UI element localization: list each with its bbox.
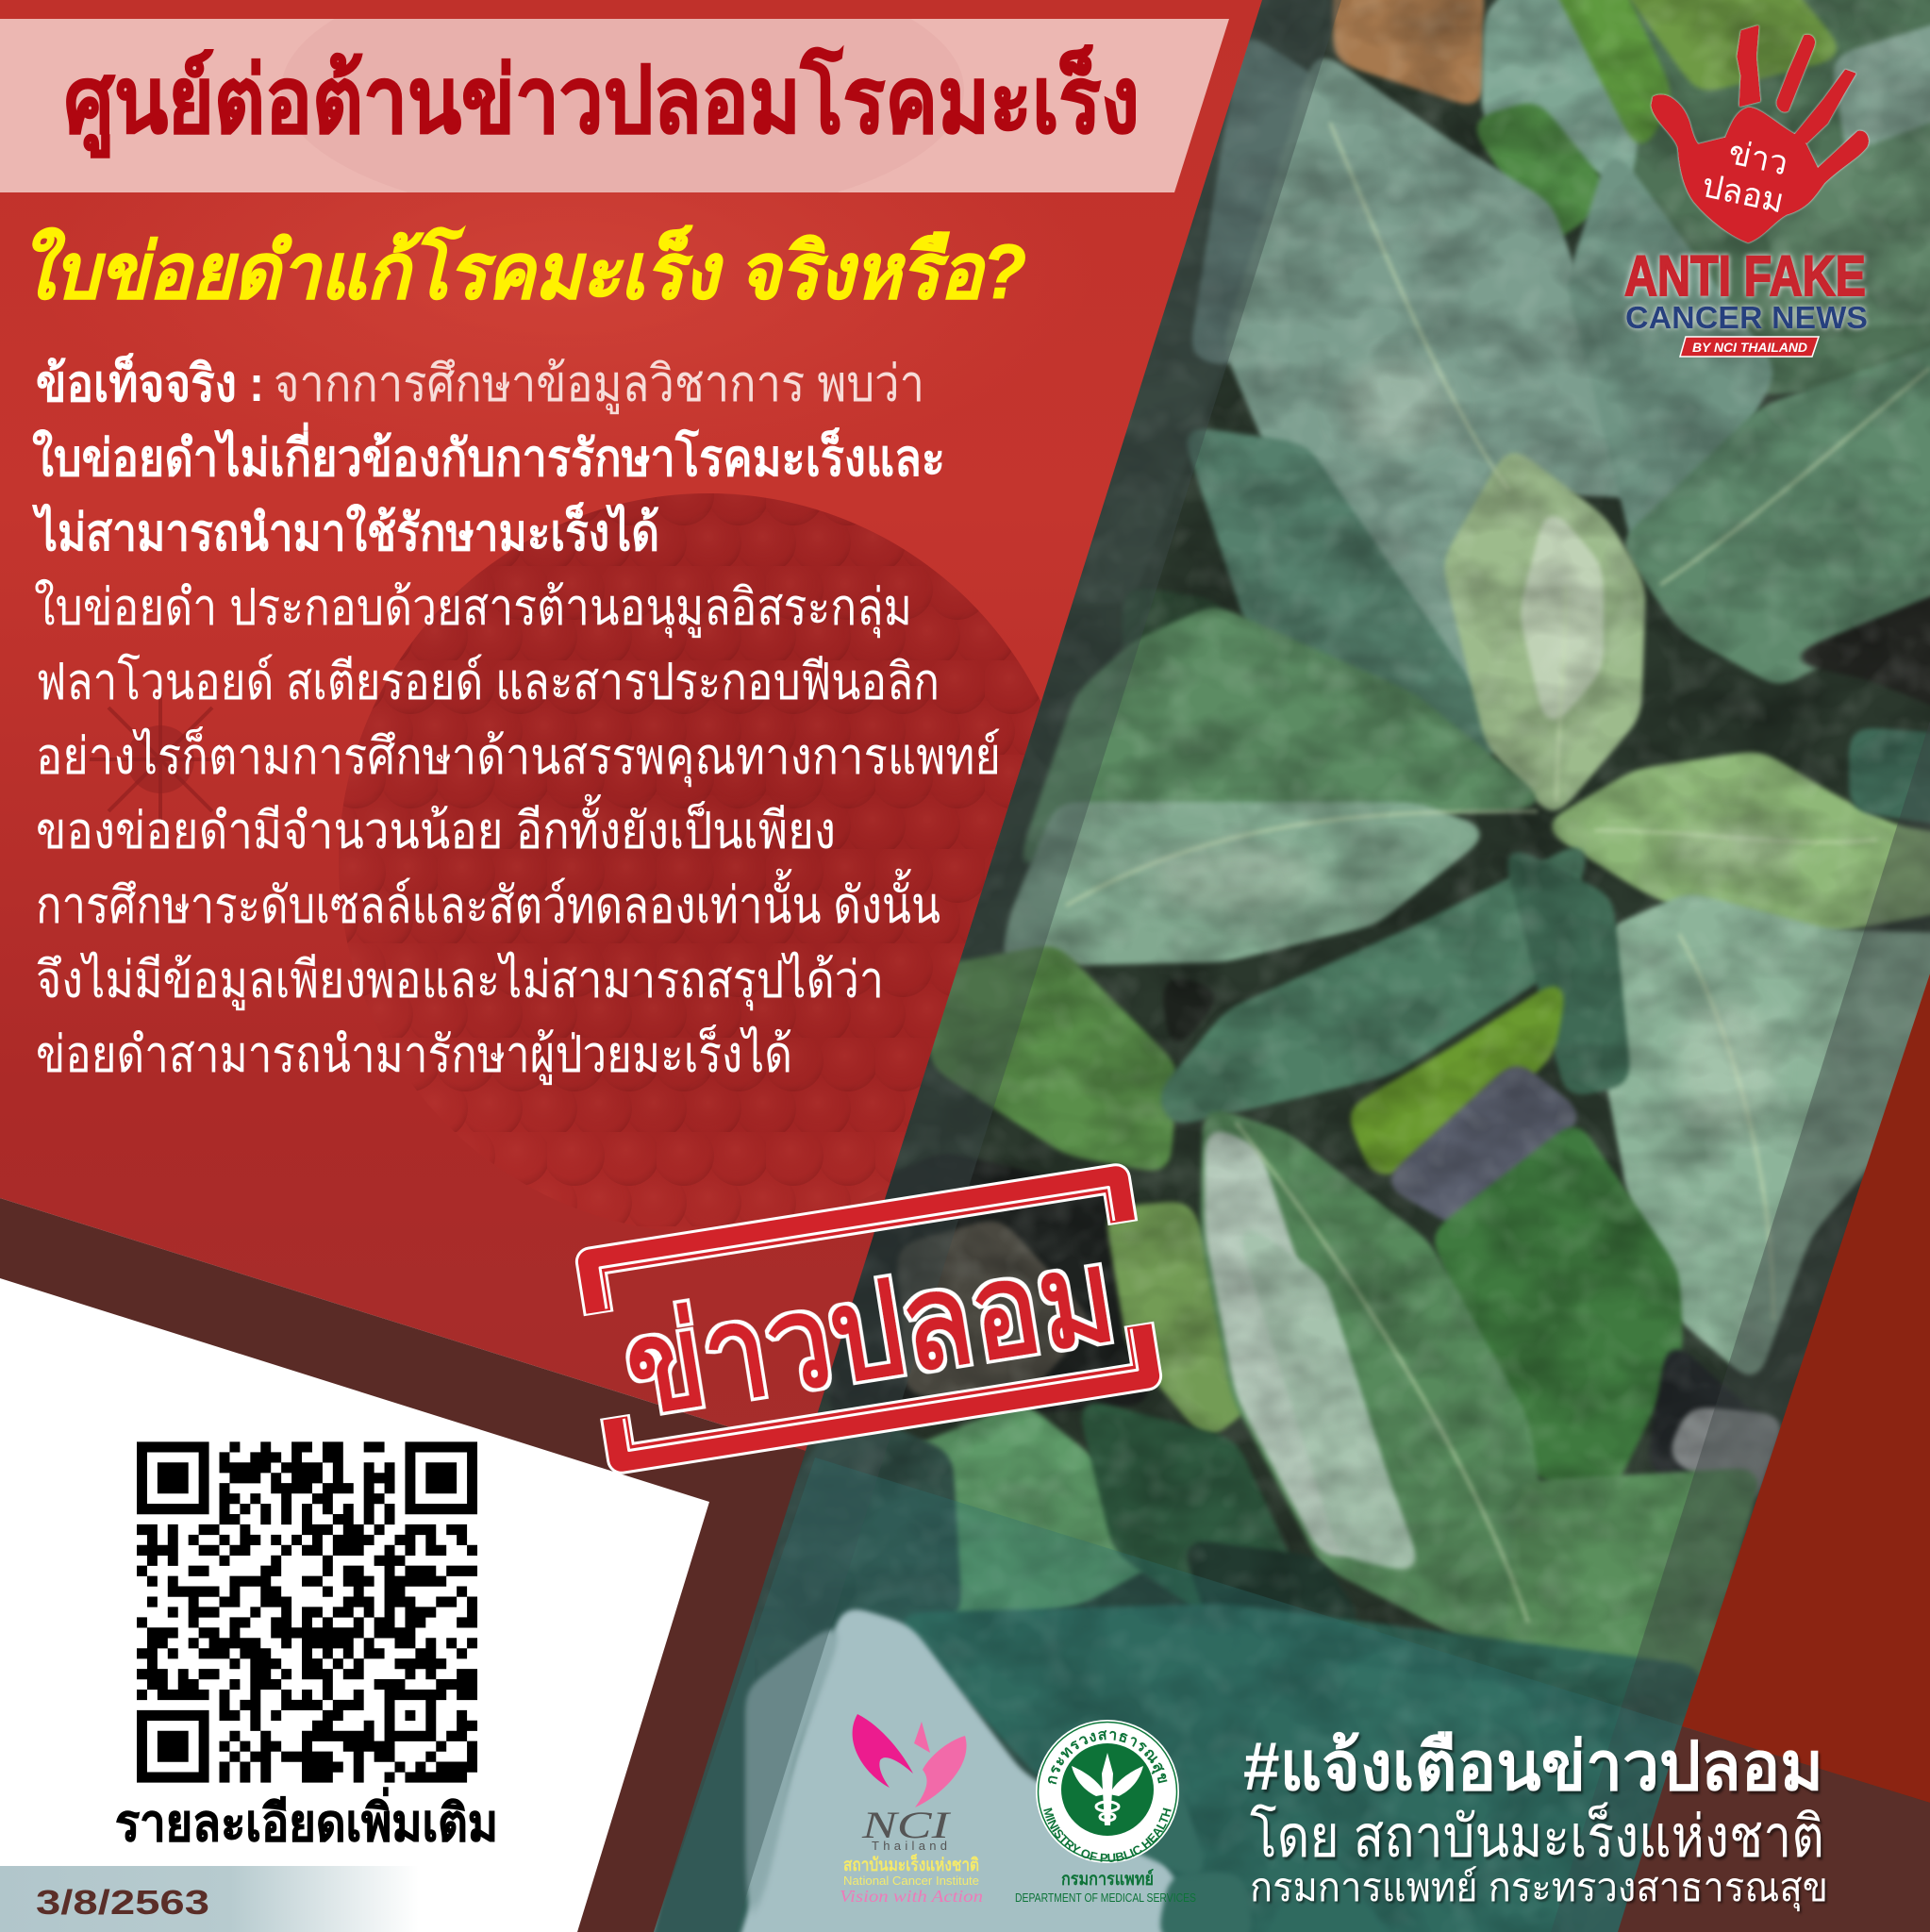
panel: right red wedge [1682,974,1930,1803]
logo: national cancer institute: Thailand [872,1839,947,1853]
logo: national cancer institute [840,1714,983,1906]
logo: national cancer institute: National Cancer Institute [843,1874,979,1888]
logo: ministry of public health: MINISTRY OF PUBLIC HEALTH [1043,1807,1172,1862]
text block: fact body: การศึกษาระดับเซลล์และสัตว์ทดลองเท่านั้น ดังนั้น [36,869,940,934]
cancer news wordmark: CANCER NEWS [1625,300,1868,335]
text block: fact body: ของข่อยดำมีจำนวนน้อย อีกทั้งยังเป็นเพียง [36,794,836,859]
icon: caduceus [1072,1753,1143,1825]
text block: fact body: ข้อเท็จจริง : [36,354,264,412]
title text: ศูนย์ต่อต้านข่าวปลอมโรคมะเร็ง [64,44,1140,158]
stamp: fake news: ข่าวปลอม [615,1220,1124,1443]
logo: anti fake cancer news [1624,26,1868,357]
text block: fact body: ไม่สามารถนำมาใช้รักษามะเร็งได้ [32,503,659,561]
logo: national cancer institute: NCI [861,1804,951,1846]
translucent band: right diagonal [1551,721,1930,1932]
photo: khoi dam leaves [641,0,1930,1932]
footer text: hashtag: #แจ้งเตือนข่าวปลอม [1243,1729,1823,1805]
logo: ministry of public health: DEPARTMENT OF MEDICAL SERVICES [1015,1891,1196,1905]
hand text: fake news: ข่าว [1725,134,1791,182]
panel: right brown wedge [1618,1726,1930,1932]
icon: butterfly [853,1714,967,1807]
icon: red hand [1653,26,1868,242]
text block: fact body: ข่อยดำสามารถนำมารักษาผู้ป่วยมะเร็งได้ [36,1024,792,1085]
text block: fact body: ฟลาโวนอยด์ สเตียรอยด์ และสารประกอบฟีนอลิก [36,653,940,710]
text block: fact body: จากการศึกษาข้อมูลวิชาการ พบว่า [274,356,924,414]
logo: ministry of public health: กระทรวงสาธารณสุข [1048,1730,1168,1785]
hand text: fake news [1699,130,1795,220]
date strip: 3/8/2563 [36,1883,209,1922]
teal overlay: bottom [654,1457,1930,1932]
QR code [137,1447,477,1777]
text block: fact body: ใบข่อยดำไม่เกี่ยวข้องกับการรักษาโรคมะเร็งและ [32,422,945,487]
text block: fact body [32,354,1001,1085]
logo: ministry of public health [1015,1720,1196,1905]
date strip [0,1866,419,1932]
footer text: by national cancer institute: โดย สถาบันมะเร็งแห่งชาติ [1250,1802,1824,1870]
anti fake wordmark: ANTI FAKE [1624,244,1866,308]
panel: white QR area [0,1278,709,1932]
text block: fact body: จึงไม่มีข้อมูลเพียงพอและไม่สามารถสรุปได้ว่า [36,951,884,1011]
title band [0,19,1229,192]
text block: fact body: อย่างไรก็ตามการศึกษาด้านสรรพคุณทางการแพทย์ [36,726,1001,788]
logo: national cancer institute: Vision with Action [840,1887,983,1906]
text block: fact body: ใบข่อยดำ ประกอบด้วยสารต้านอนุมูลอิสระกลุ่ม [34,578,912,639]
footer text: department: กรมการแพทย์ กระทรวงสาธารณสุข [1250,1865,1828,1912]
badge: by nci thailand [1680,337,1819,357]
badge: by nci thailand: BY NCI THAILAND [1692,340,1807,355]
hand text: fake news: ปลอม [1699,167,1788,220]
panel: brown strip [0,1198,806,1932]
translucent band: left diagonal [654,0,1341,1932]
logo: national cancer institute: สถาบันมะเร็งแห่งชาติ [843,1853,979,1875]
logo: ministry of public health: กรมการแพทย์ [1061,1869,1154,1890]
QR caption: รายละเอียดเพิ่มเติม [115,1787,498,1852]
panel: red background [0,0,1262,1451]
heading: question: ใบข่อยดำแก้โรคมะเร็ง จริงหรือ? [19,225,1026,315]
